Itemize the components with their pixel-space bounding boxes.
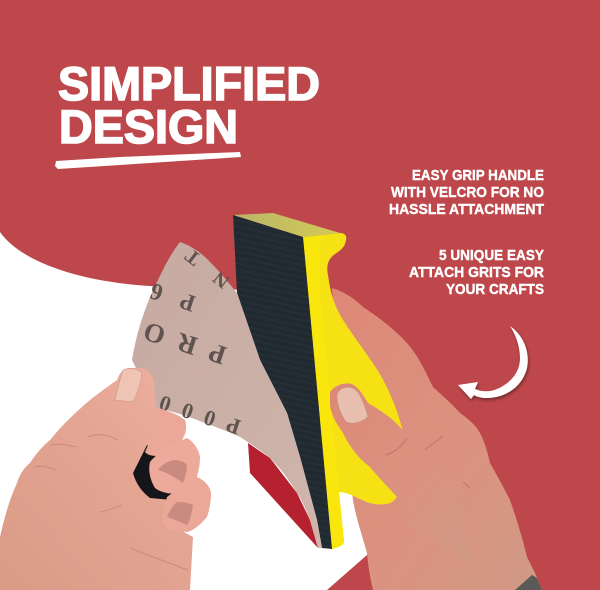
sandpaper sheet xyxy=(132,242,322,548)
palm and thumb xyxy=(0,368,193,590)
sanding block handle xyxy=(303,233,410,549)
index finger xyxy=(145,407,186,456)
white curved background shape xyxy=(0,232,385,590)
knuckle creases xyxy=(35,435,188,570)
callout: easy grip handle: HASSLE ATTACHMENT xyxy=(389,202,544,218)
callout: unique grits: YOUR CRAFTS xyxy=(446,282,544,298)
printed text PRO: PRO xyxy=(140,316,230,371)
ring finger xyxy=(162,477,211,532)
thumb nail xyxy=(115,369,142,402)
black object held in hand xyxy=(133,445,172,500)
red abrasive underside xyxy=(248,443,318,548)
left hand xyxy=(0,368,211,590)
callout: easy grip handle: EASY GRIP HANDLE xyxy=(412,168,544,184)
middle finger xyxy=(149,438,200,494)
ring finger nail xyxy=(167,502,193,525)
title xyxy=(58,57,320,153)
icon: curved arrow xyxy=(458,326,528,399)
callout: unique grits: ATTACH GRITS FOR xyxy=(409,265,545,281)
callout: unique grits xyxy=(409,248,545,298)
knuckle creases xyxy=(385,436,470,488)
printed text grit: P000 xyxy=(156,390,244,440)
callout: easy grip handle xyxy=(389,168,544,218)
printed text top: NT xyxy=(181,244,234,292)
thumb nail xyxy=(337,387,368,423)
wrist strap xyxy=(515,575,542,590)
middle finger nail xyxy=(158,460,187,483)
block top face xyxy=(233,213,340,237)
right hand: palm and fingers behind handle xyxy=(332,288,542,590)
callout: easy grip handle: WITH VELCRO FOR NO xyxy=(391,185,544,201)
brush stroke underline xyxy=(55,152,241,169)
velcro pad xyxy=(233,215,332,549)
handle front face strip xyxy=(303,236,344,549)
title: DESIGN xyxy=(59,100,238,153)
right thumb xyxy=(330,383,470,560)
callout: unique grits: 5 UNIQUE EASY xyxy=(439,248,544,264)
printed text P6: P6 xyxy=(147,277,199,316)
title: SIMPLIFIED xyxy=(58,57,320,110)
